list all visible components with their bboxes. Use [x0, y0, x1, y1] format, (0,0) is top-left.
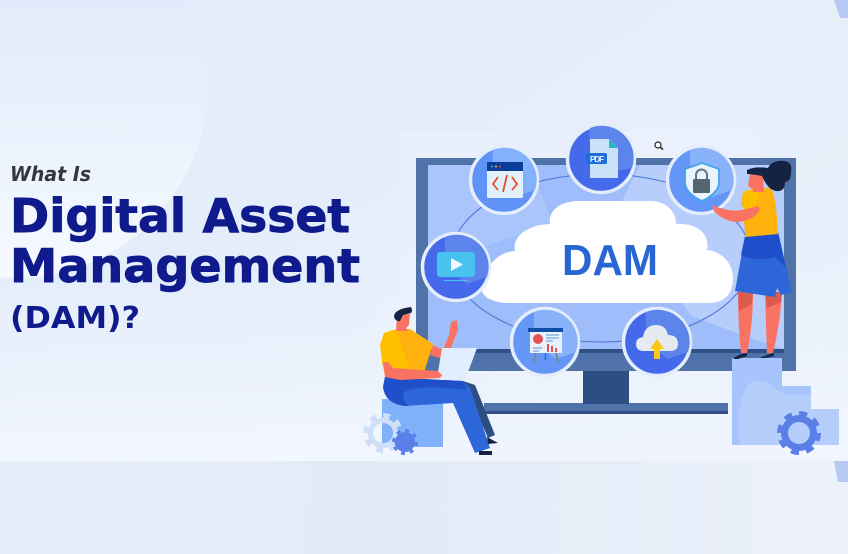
title — [10, 162, 360, 336]
icon: presentation chart — [512, 308, 578, 376]
laptop — [438, 348, 477, 380]
back leg — [463, 381, 495, 438]
icon: code window — [470, 146, 538, 214]
shoes — [733, 353, 747, 359]
label: DAM: DAM — [562, 236, 658, 285]
hair and head — [748, 172, 764, 192]
heading: Digital Asset: Digital Asset — [10, 189, 350, 243]
monitor — [416, 158, 796, 414]
shirt — [741, 188, 778, 237]
orbit ring — [451, 174, 751, 342]
icon: PDF — [568, 126, 634, 192]
shirt — [380, 329, 433, 376]
icon: cloud upload — [624, 308, 690, 376]
forearm — [383, 362, 442, 380]
platform — [732, 358, 839, 445]
stool — [382, 399, 443, 447]
heading: What Is: What Is — [10, 162, 91, 186]
legs — [738, 292, 753, 353]
skirt — [735, 232, 792, 297]
heading: (DAM)?: (DAM)? — [10, 301, 140, 336]
heading: Management: Management — [10, 239, 360, 293]
woman figure — [712, 161, 839, 445]
icon: zoom cursor — [655, 142, 663, 150]
icon: video — [422, 234, 490, 300]
gear: platform — [780, 414, 818, 452]
head and hair — [396, 314, 410, 331]
arm — [712, 205, 760, 222]
gears — [370, 420, 396, 446]
icon: PDF: PDF — [590, 155, 604, 164]
arm raised — [430, 320, 458, 360]
icon: security shield — [668, 146, 734, 214]
cloud with DAM label — [482, 201, 733, 303]
man figure — [366, 307, 498, 455]
shoes — [487, 437, 498, 444]
front leg — [383, 377, 490, 453]
